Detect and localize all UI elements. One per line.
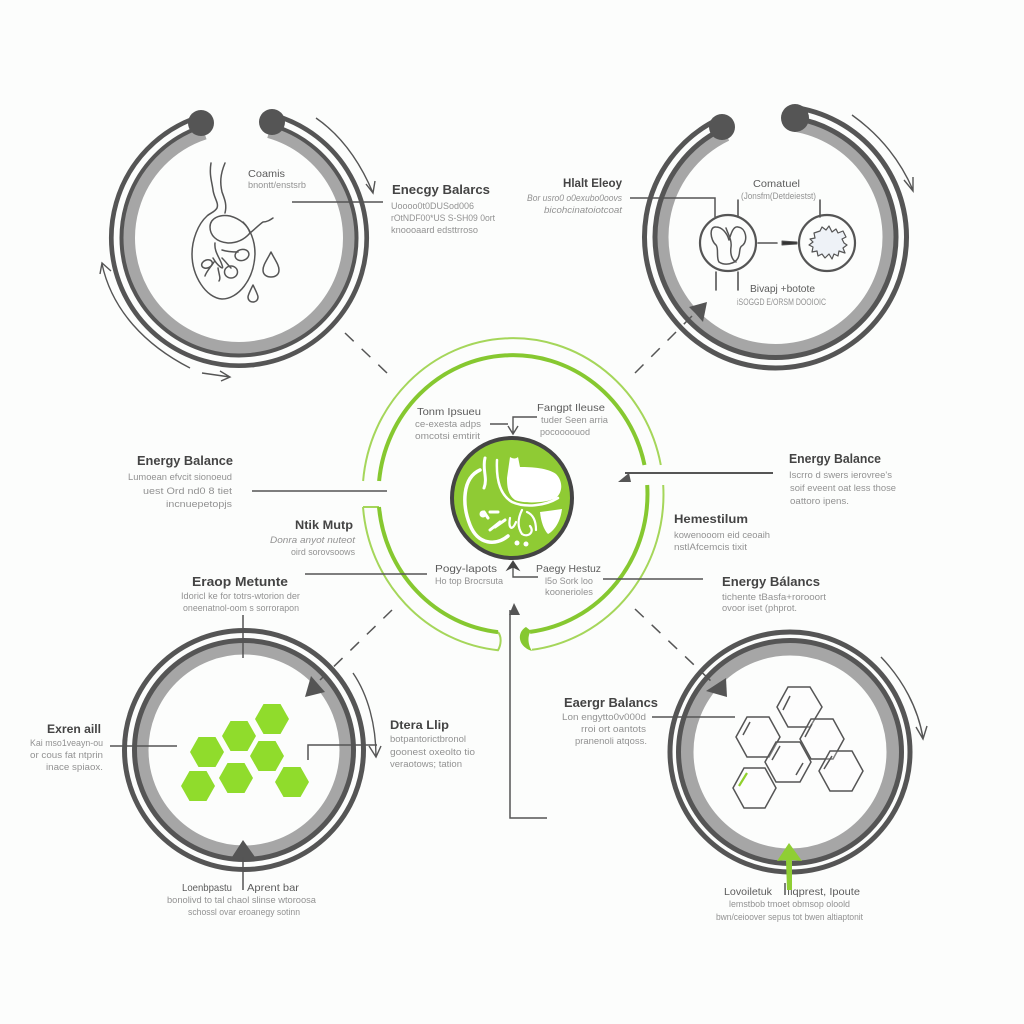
label: upper cell caption: Comatuel: [753, 178, 800, 190]
text block: Energy Balance top-left: Uoooo0t0DUSod006: [391, 201, 474, 211]
ring: green lower-left arc: [363, 507, 501, 650]
text block: right caption: [390, 720, 475, 769]
text block: metabolic flow: bicohcinatoiotcoat: [544, 205, 623, 215]
text block: Hemestilum: Hemestilum: [674, 514, 748, 526]
ring: bottom-right closed ring: [670, 632, 910, 872]
text block: inner bottom-right: [536, 563, 601, 597]
text block: inner bottom-left: [435, 563, 503, 586]
text block: right caption: botpantorictbronol: [390, 734, 466, 744]
label: lower cell caption: [737, 283, 827, 307]
ring: top-left open ring: [81, 80, 397, 396]
text block: bottom caption: [716, 886, 864, 922]
text block: Ntik Mutp: [270, 520, 356, 557]
text block: left Energy Balance: Energy Balance: [137, 454, 233, 468]
text block: bottom caption: bwn/ceioover sepus tot bwen altiaptonit: [716, 912, 864, 922]
text block: inner top-left: ce-exesta adps: [415, 419, 482, 429]
text block: inner top-left: omcotsi emtirit: [415, 431, 481, 441]
text block: inner top-right: Fangpt Ileuse: [537, 402, 605, 414]
text block: right caption: veraotows; tation: [390, 759, 462, 769]
text block: right caption: Dtera Llip: [390, 720, 449, 732]
text block: right Energy Balance: oattoro ipens.: [790, 496, 849, 506]
text block: inner bottom-right: Paegy Hestuz: [536, 563, 601, 575]
text block: inner top-left: Tonm Ipsueu: [417, 406, 481, 418]
text block: left caption: Exren aill: [47, 724, 101, 736]
icon: digestive organ outline with drops: [192, 163, 279, 302]
text block: top caption: Idoricl ke for totrs-wtorion der: [181, 591, 300, 601]
text block: right Energy Balance: [789, 452, 896, 506]
text block: left caption: or cous fat ntprin: [30, 750, 103, 760]
text block: inner bottom-left: Ho top Brocrsuta: [435, 576, 503, 586]
text block: Hemestilum: kowenooom eid ceoaih: [674, 530, 770, 540]
arrow: bottom-left clockwise: [353, 673, 381, 757]
text block: inner bottom-left: Pogy-lapots: [435, 563, 497, 575]
text block: inner top-right: [537, 402, 608, 437]
text block: Energy Balance left of ring: [562, 696, 658, 746]
text block: inner bottom-right: koonerioles: [545, 587, 594, 597]
panel: top-left digestive ring: [81, 80, 496, 396]
text block: bottom caption: bonolivd to tal chaol slinse wtoroosa: [167, 895, 316, 905]
text block: inner top-right: pocoooouod: [540, 427, 590, 437]
text block: left Energy Balance: [128, 454, 233, 509]
leader line: top-left callout: [292, 201, 383, 203]
text block: left Energy Balance: uest Ord nd0 8 tiet: [143, 486, 233, 496]
text block: Energy Balance left of ring: pranenoli atqoss.: [575, 736, 647, 746]
leader line: right lower callout: [603, 578, 703, 580]
leader line: left lower callout: [305, 573, 427, 575]
text block: inner top-left: [415, 406, 482, 441]
text block: bottom caption: Loenbpastu: [182, 882, 232, 894]
arrow: bottom-right clockwise: [881, 657, 927, 739]
text block: bottom caption: lemstbob tmoet obmsop oloold: [729, 899, 850, 909]
text block: metabolic flow: Bor usro0 o0exubo0oovs: [527, 193, 623, 203]
text block: Hemestilum: nstlAfcemcis tixit: [674, 542, 748, 552]
label: organ caption: bnontt/enstsrb: [248, 180, 306, 190]
arrow: top-left counter-clockwise: [100, 263, 230, 381]
text block: Hemestilum: [674, 514, 770, 552]
text block: Energy Balance top-left: Enecgy Balarcs: [392, 183, 490, 197]
text block: right lower Energy Balance: [722, 575, 827, 613]
text block: right Energy Balance: Iscrro d swers ierovree's: [789, 470, 893, 480]
dashed connector: centre to bottom-left with arrowhead: [305, 610, 392, 697]
icon: cell pair with connector: [700, 200, 855, 290]
panel: centre green ring: [363, 338, 663, 651]
icon: outlined hexagon molecule: [733, 687, 863, 808]
text block: top caption: [181, 575, 300, 613]
text block: inner top-right: tuder Seen arria: [541, 415, 608, 425]
text block: bottom caption: [167, 882, 316, 917]
panel: top-right cell ring: [527, 86, 926, 388]
text block: left caption: Kai mso1veayn-ou: [30, 738, 103, 748]
text block: bottom caption: Aprent bar: [247, 882, 300, 894]
ring: green upper arc: [363, 338, 661, 481]
icon: green hexagon cluster: [181, 704, 309, 801]
text block: right caption: goonest oxeolto tio: [390, 747, 475, 757]
text block: Ntik Mutp: Donra anyot nuteot: [270, 535, 356, 545]
text block: Ntik Mutp: oird sorovsoows: [291, 547, 356, 557]
arrow: into disc from top: [490, 417, 537, 434]
text block: Energy Balance left of ring: Eaergr Balancs: [564, 696, 658, 710]
text block: Energy Balance top-left: knoooaard edsttrroso: [391, 225, 478, 235]
label: upper cell caption: [741, 178, 816, 201]
label: lower cell caption: Bivapj +botote: [750, 283, 815, 295]
dashed connector: top-left to centre: [345, 333, 387, 373]
text block: Energy Balance top-left: rOtNDF00*US S-SH09 0ort: [391, 213, 496, 223]
text block: bottom caption: schossl ovar eroanegy sotinn: [188, 907, 300, 917]
text block: metabolic flow: [527, 178, 623, 215]
text block: bottom caption: Lovoiletuk: [724, 886, 773, 898]
arrow: green upward: [777, 843, 802, 895]
text block: Energy Balance left of ring: Lon engytto0v000d: [562, 712, 646, 722]
text block: top caption: Eraop Metunte: [192, 575, 288, 589]
icon: green digestive disc: [452, 438, 572, 558]
arrow: bottom triangle: [232, 840, 255, 857]
ring: bottom-left closed ring: [124, 630, 364, 870]
dashed connector: centre to bottom-right with arrowhead: [635, 609, 727, 697]
leader line: to molecule: [652, 716, 735, 718]
panel: bottom-right molecule ring: [562, 609, 927, 922]
arrow: right callout pointing to centre: [618, 473, 773, 482]
text block: Ntik Mutp: Ntik Mutp: [295, 520, 353, 532]
panel: bottom-left hexagon ring: [30, 575, 475, 917]
text block: right Energy Balance: Energy Balance: [789, 452, 881, 466]
text block: top caption: oneenatnol-oom s sorrorapon: [183, 603, 299, 613]
text block: left Energy Balance: Lumoean efvcit sionoeud: [128, 472, 232, 482]
text block: left caption: [30, 724, 103, 772]
text block: right lower Energy Balance: Energy Bálancs: [722, 575, 820, 589]
ring: green lower-right arc: [520, 485, 663, 651]
text block: right Energy Balance: soif eveent oat less those: [790, 483, 896, 493]
arrow: top-right clockwise: [852, 115, 913, 191]
text block: left Energy Balance: incnuepetopjs: [166, 499, 233, 509]
leader lines: bottom-left cross ticks: [110, 615, 377, 890]
label: organ caption: Coamis: [248, 168, 285, 180]
arrow: top-left clockwise: [316, 118, 375, 193]
text block: right lower Energy Balance: ovoor iset (phprot.: [722, 603, 797, 613]
dashed connector: centre to top-right with arrowhead: [635, 302, 707, 373]
leader line: top-right callout: [630, 198, 715, 217]
text block: metabolic flow: Hlalt Eleoy: [563, 178, 623, 190]
label: lower cell caption: iSOGGD E/ORSM DOOIOIC: [737, 297, 827, 307]
label: organ caption: [248, 168, 306, 190]
label: upper cell caption: (Jonsfm(Detdeiestst): [741, 191, 816, 201]
ring: top-right open ring: [625, 86, 926, 388]
leader line: left callout: [252, 490, 387, 492]
text block: inner bottom-right: l5o Sork loo: [545, 576, 593, 586]
arrow: central L-shaped arrow: [509, 603, 547, 818]
arrow: into disc from bottom: [507, 561, 538, 577]
text block: left caption: inace spiaox.: [46, 762, 103, 772]
text block: right lower Energy Balance: tichente tBasfa+rorooort: [722, 592, 827, 602]
text block: Energy Balance left of ring: rroi ort oantots: [581, 724, 647, 734]
text block: Energy Balance top-left: [391, 183, 496, 235]
text block: bottom caption: Ilqprest, Ipoute: [787, 886, 860, 898]
